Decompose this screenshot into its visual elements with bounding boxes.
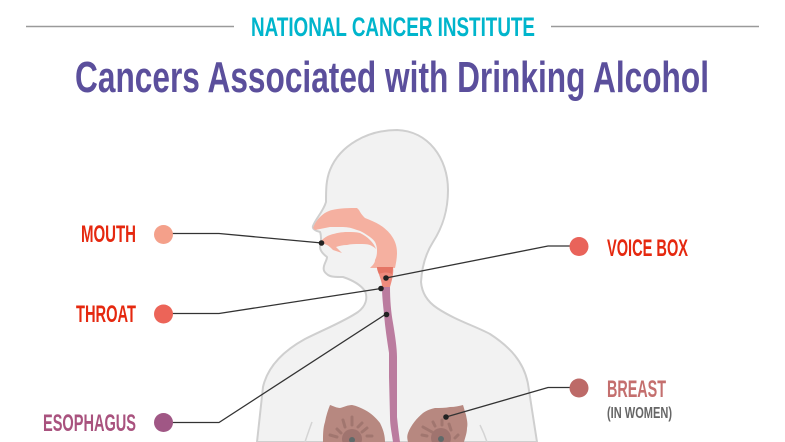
upper cavity [313, 208, 397, 268]
esophagus callout: ESOPHAGUS [43, 410, 136, 437]
breast callout [443, 376, 672, 422]
voice box and throat [377, 267, 393, 287]
right breast [407, 405, 467, 442]
breast callout: (IN WOMEN) [607, 405, 672, 422]
voice box callout: VOICE BOX [607, 235, 688, 262]
left breast [323, 405, 385, 442]
mouth and nasal cavity [313, 208, 397, 268]
throat callout: THROAT [76, 301, 136, 328]
breasts [323, 405, 467, 442]
header label: NATIONAL CANCER INSTITUTE [251, 12, 535, 42]
body silhouette [257, 130, 537, 442]
arm creases [305, 422, 487, 442]
esophagus [382, 287, 400, 442]
breast callout: BREAST [607, 376, 666, 403]
voice box callout [383, 235, 688, 281]
esophagus callout [43, 312, 389, 437]
tongue [322, 232, 376, 253]
mouth callout [81, 221, 324, 248]
mouth callout: MOUTH [81, 221, 136, 248]
throat callout [76, 286, 384, 328]
